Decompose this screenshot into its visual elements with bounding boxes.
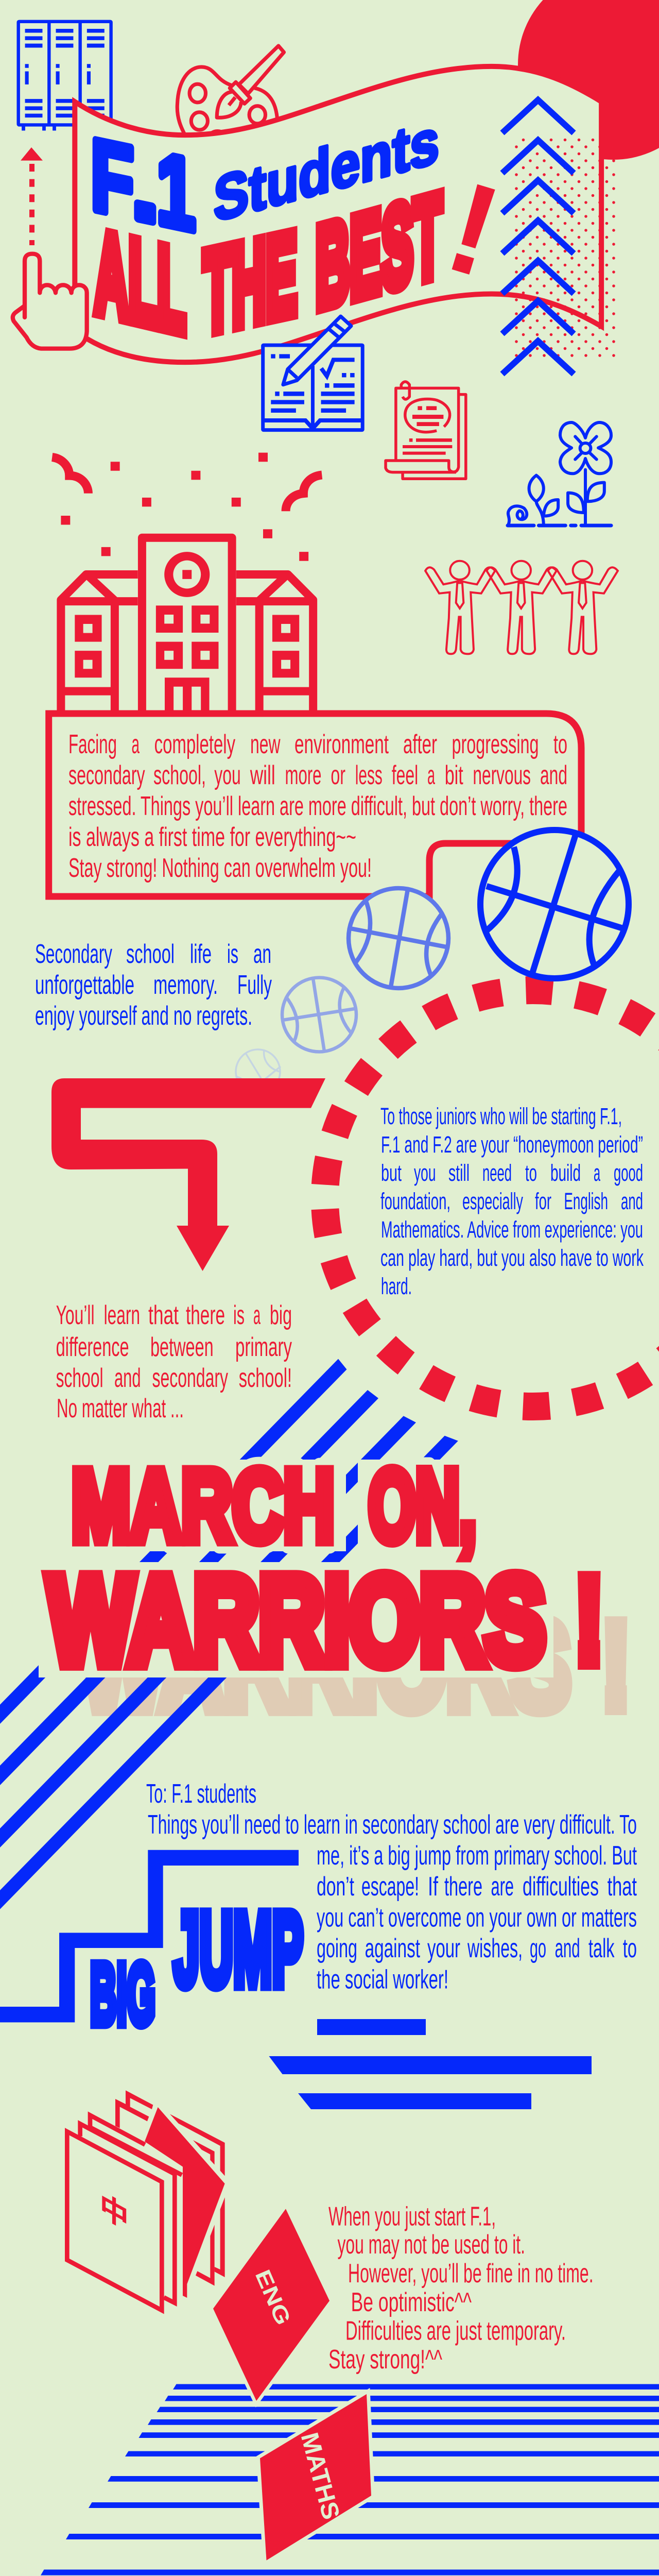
heading: MARCH ON, WARRIORS!: [48, 1449, 604, 1689]
basketball pale: [282, 978, 356, 1052]
paragraph: new environment: to: [553, 730, 567, 759]
paragraph: to F.1 students: against: [365, 1934, 420, 1963]
paragraph: new environment: nervous: [473, 760, 531, 790]
paragraph: to those juniors: need: [482, 1160, 512, 1186]
ENG label: ENG: [251, 2266, 296, 2329]
icon: open book and pencil: [263, 316, 362, 430]
paragraph: to those juniors: and: [621, 1188, 643, 1214]
paragraph: to those juniors: for: [535, 1188, 551, 1214]
paragraph: to those juniors: English: [564, 1188, 608, 1214]
icon: stack of textbooks: [67, 2090, 225, 2310]
paragraph: to F.1 students: to: [623, 1934, 637, 1963]
paragraph: secondary school life: Fully: [237, 970, 272, 1000]
paragraph: big difference: is: [233, 1300, 245, 1330]
paragraph: big difference: and: [114, 1363, 141, 1393]
icon: lockers: [19, 22, 111, 130]
paragraph: to F.1 students: wishes,: [467, 1934, 523, 1963]
paragraph: new environment: you: [214, 760, 241, 790]
title: F.1 Students: .: [131, 126, 159, 244]
paragraph: to F.1 students: difficulties: [523, 1872, 599, 1902]
paragraph: secondary school life: is: [227, 939, 238, 969]
icon: flower and plants: [508, 422, 611, 526]
paragraph: new environment: [68, 730, 567, 883]
halftone dots: [514, 138, 616, 358]
paragraph: big difference: big: [270, 1300, 292, 1330]
paragraph: to F.1 students: go: [530, 1934, 546, 1963]
heading halo: MARCH: [72, 1449, 335, 1562]
panel: new environment text box: [49, 714, 581, 896]
icon: scroll note: [386, 382, 466, 479]
paragraph: to F.1 students: [146, 1779, 637, 1995]
paragraph: to F.1 students: the social worker!: [317, 1965, 448, 1995]
paragraph: to those juniors: foundation,: [380, 1188, 450, 1214]
heading halo: !: [574, 1551, 604, 1689]
paragraph: new environment: feel: [392, 760, 418, 790]
paragraph: new environment: Facing: [68, 730, 117, 759]
paragraph: secondary school life: Secondary: [35, 939, 112, 969]
three blue bars: [269, 2019, 592, 2109]
paragraph: new environment: or: [331, 760, 345, 790]
paragraph: when you start F.1: [328, 2202, 594, 2375]
red sun circle: [518, 0, 659, 160]
title: F.1 Students: Students: [214, 106, 439, 235]
title: ALL THE BEST !: [95, 155, 515, 357]
paragraph: to F.1 students: don’t: [317, 1872, 354, 1902]
paragraph: new environment: after: [403, 730, 437, 759]
heading: MARCH ON, WARRIORS!: ON,: [369, 1450, 476, 1562]
label: BIG JUMP: JUMP: [174, 1891, 303, 2008]
paragraph: new environment: more: [285, 760, 321, 790]
label: BIG JUMP: [90, 1891, 303, 2042]
paragraph: to F.1 students: and: [555, 1934, 580, 1963]
paragraph: big difference: school: [56, 1363, 103, 1393]
heading knockout blocks: [39, 1460, 553, 1677]
title: ALL THE BEST !: BEST: [316, 170, 442, 333]
paragraph: to those juniors: but: [381, 1160, 402, 1186]
paragraph: new environment: a: [132, 730, 140, 759]
paragraph: to those juniors: [380, 1103, 644, 1299]
title: ALL THE BEST !: THE: [203, 209, 297, 357]
shadow heading: WARRIORS: WARRIORS: [80, 1597, 570, 1735]
paragraph: to F.1 students: If: [428, 1872, 438, 1902]
icon: school building: [61, 538, 313, 711]
banner ribbon: [75, 66, 601, 362]
paragraph: to F.1 students: To: F.1 students: [146, 1779, 256, 1809]
arrow: big red bent arrow: [51, 1078, 325, 1271]
paragraph: new environment: secondary: [68, 760, 145, 790]
paragraph: to those juniors: hard.: [381, 1273, 412, 1299]
paragraph: new environment: environment: [294, 730, 389, 759]
paragraph: to F.1 students: that: [608, 1872, 637, 1902]
paragraph: big difference: a: [253, 1300, 261, 1330]
paragraph: to F.1 students: your: [427, 1934, 460, 1963]
icon: pointing hand: [13, 254, 87, 349]
perspective blue stripes: [41, 2384, 659, 2575]
basketball blue: [480, 830, 629, 978]
paragraph: to F.1 students: are: [491, 1872, 514, 1902]
paragraph: new environment: Stay strong! Nothing can overwhelm you!: [68, 853, 372, 883]
stepped line: [0, 1850, 299, 2022]
chevron arrows: [502, 100, 574, 374]
paragraph: to F.1 students: escape!: [361, 1872, 419, 1902]
paragraph: new environment: completely: [154, 730, 235, 759]
dashed red ring: [325, 990, 659, 1406]
title: ALL THE BEST !: ALL: [95, 208, 186, 357]
paragraph: new environment: a: [427, 760, 435, 790]
paragraph: new environment: will: [250, 760, 275, 790]
paragraph: to those juniors: especially: [462, 1188, 523, 1214]
heading halo: WARRIORS: [48, 1551, 545, 1689]
paragraph: new environment: new: [250, 730, 281, 759]
title: F.1 Students: F: [91, 117, 134, 239]
paragraph: big difference: school!: [239, 1363, 292, 1393]
paragraph: when you start F.1: Stay strong!^^: [328, 2345, 442, 2375]
paragraph: new environment: school,: [153, 760, 206, 790]
paragraph: new environment: and: [540, 760, 567, 790]
paragraph: new environment: less: [355, 760, 383, 790]
title: F.1 Students: 1: [157, 131, 196, 252]
paragraph: big difference: No matter what ...: [57, 1394, 184, 1423]
heading halo: ON,: [369, 1450, 476, 1562]
paragraph: secondary school life: memory.: [153, 970, 218, 1000]
label: BIG JUMP: BIG: [90, 1946, 155, 2042]
paragraph: big difference: secondary: [152, 1363, 228, 1393]
paragraph: when you start F.1: Be optimistic^^: [351, 2287, 472, 2317]
book label: 中: [99, 2188, 129, 2236]
heading: MARCH ON, WARRIORS!: !: [574, 1551, 604, 1689]
paragraph: to those juniors: to: [525, 1160, 537, 1186]
paragraph: new environment: progressing: [452, 730, 539, 759]
dashed arrow up: [21, 147, 43, 245]
MATHS label: MATHS: [296, 2430, 344, 2522]
basketball mid: [349, 888, 448, 988]
icon: three people holding hands: [425, 561, 618, 654]
icon: paint palette: [177, 46, 284, 144]
basketball faint: [236, 1049, 281, 1094]
title: ALL THE BEST !: !: [432, 155, 515, 305]
paragraph: to F.1 students: there: [444, 1872, 482, 1902]
paragraph: to F.1 students: talk: [588, 1934, 615, 1963]
paragraph: when you start F.1: you may not be used to it.: [338, 2230, 525, 2260]
confetti: [52, 453, 322, 561]
paragraph: big difference: primary: [235, 1332, 292, 1362]
paragraph: to those juniors: a: [594, 1160, 601, 1186]
heading halo: [48, 1449, 604, 1689]
paragraph: when you start F.1: When you just start F.1,: [328, 2202, 496, 2232]
paragraph: big difference: difference: [56, 1332, 129, 1362]
paragraph: to those juniors: still: [448, 1160, 470, 1186]
paragraph: big difference: learn: [104, 1300, 140, 1330]
paragraph: secondary school life: [35, 939, 272, 1031]
paragraph: secondary school life: an: [253, 939, 271, 969]
book: ENG: [213, 2209, 330, 2401]
heading: MARCH ON, WARRIORS!: WARRIORS: [48, 1551, 545, 1689]
heading: MARCH ON, WARRIORS!: MARCH: [72, 1449, 335, 1562]
paragraph: secondary school life: school: [126, 939, 175, 969]
paragraph: big difference: there: [186, 1300, 225, 1330]
book: MATHS: [260, 2394, 371, 2561]
shadow heading: WARRIORS: !: [601, 1597, 631, 1735]
paragraph: big difference: You’ll: [56, 1300, 95, 1330]
title: F.1 Students: [91, 106, 439, 252]
paragraph: to F.1 students: going: [317, 1934, 357, 1963]
paragraph: secondary school life: life: [190, 939, 212, 969]
paragraph: big difference: [56, 1300, 292, 1423]
paragraph: new environment: bit: [445, 760, 463, 790]
paragraph: secondary school life: enjoy yourself and no regrets.: [35, 1001, 252, 1031]
paragraph: new environment: is always a first time for everything~~: [68, 822, 356, 852]
paragraph: to those juniors: build: [550, 1160, 581, 1186]
diagonal blue stripes: [0, 1359, 458, 1909]
paragraph: big difference: between: [150, 1332, 214, 1362]
paragraph: to those juniors: you: [414, 1160, 436, 1186]
paragraph: secondary school life: unforgettable: [35, 970, 134, 1000]
paragraph: big difference: that: [148, 1300, 179, 1330]
